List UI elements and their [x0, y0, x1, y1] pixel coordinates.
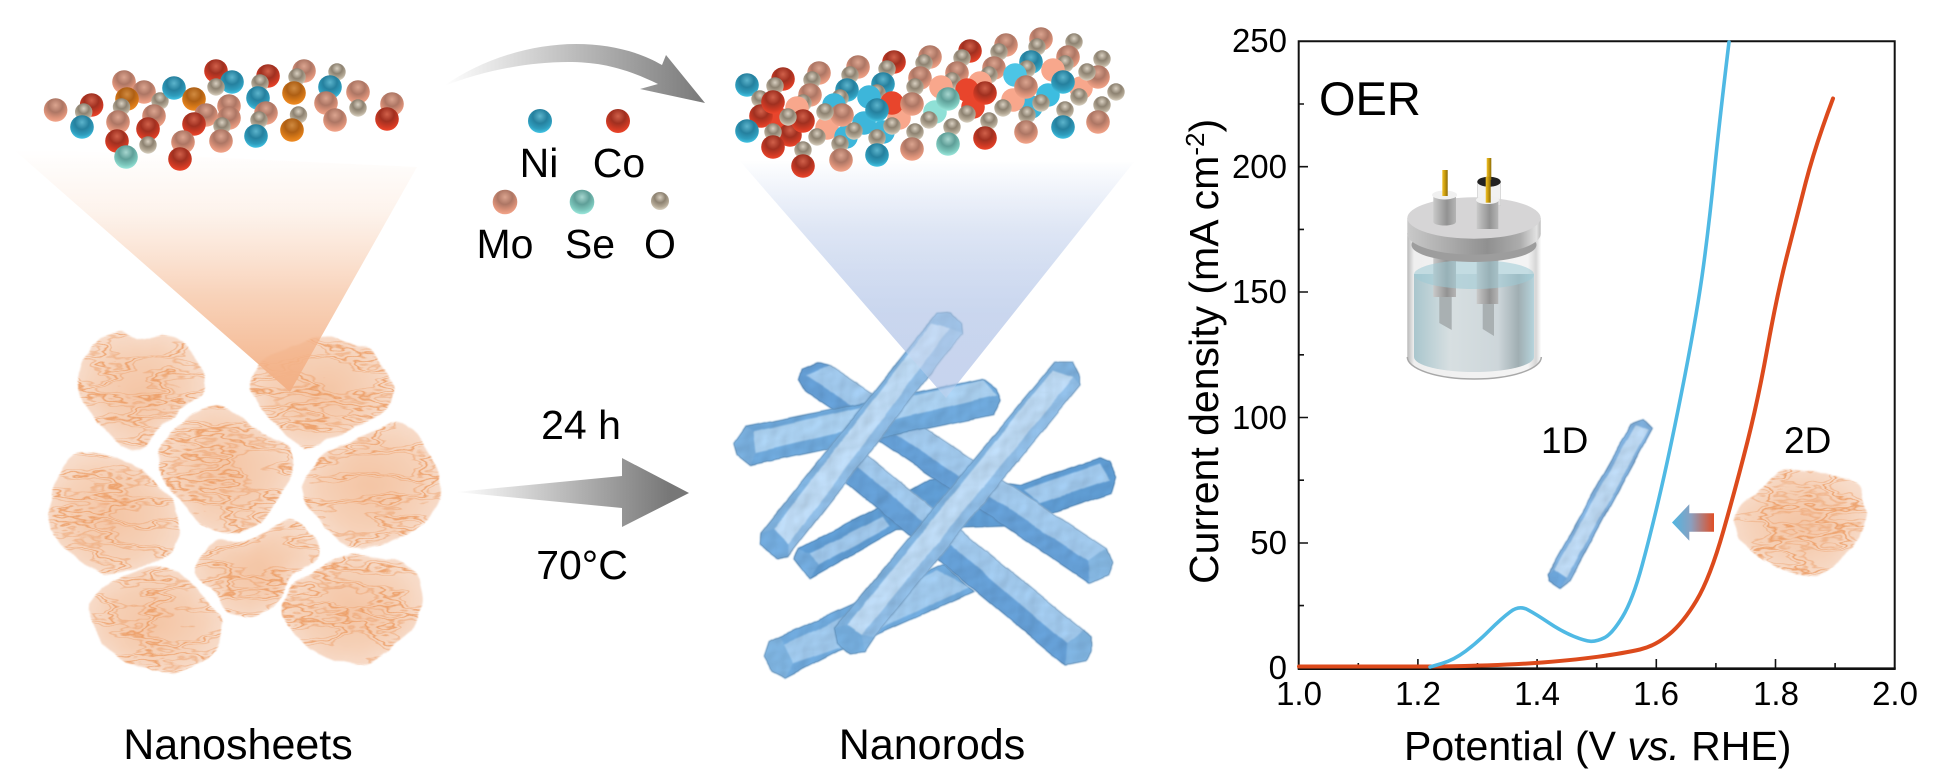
nanosheet left [49, 455, 178, 573]
label: OER: OER [1319, 72, 1421, 125]
nanosheet top left [80, 336, 202, 447]
nanosheet bottom right [284, 556, 421, 663]
x axis tick labels: 1.4 [1514, 675, 1560, 712]
label: 24 h: 24 h [541, 402, 621, 448]
rod diagonal upper [798, 362, 1113, 583]
x axis tick labels: 1.0 [1276, 675, 1322, 712]
rod steep front [833, 362, 1080, 653]
label: 1D: 1D [1541, 420, 1588, 461]
nanosheet bottom left [88, 570, 220, 673]
x axis title: Potential (V vs. RHE) [1404, 723, 1791, 769]
blue zoom cone overlay [739, 160, 1134, 398]
legend item: O [644, 192, 676, 267]
y axis tick labels: 100 [1232, 399, 1287, 436]
y axis tick labels [1232, 22, 1287, 686]
rod lower left to right [793, 457, 1117, 579]
legend item: Ni [520, 109, 558, 186]
nanosheet right [303, 422, 439, 547]
label: Nanorods: Nanorods [839, 721, 1025, 769]
y axis tick labels: 0 [1269, 649, 1287, 686]
rod bottom left [763, 563, 975, 678]
rod steep back [759, 312, 963, 559]
x axis tick labels: 2.0 [1872, 675, 1918, 712]
y axis tick labels: 250 [1232, 22, 1287, 59]
label: Nanosheets: Nanosheets [123, 721, 353, 769]
curve: 2D nanosheets [1299, 98, 1833, 666]
rod diagonal lower [830, 440, 1092, 666]
arrow: blue-red shift [1672, 504, 1714, 541]
rod near horizontal [733, 378, 1001, 466]
icon: mini nanorod [1547, 419, 1653, 589]
label: 70°C: 70°C [536, 542, 628, 588]
blue zoom cone back [739, 160, 1134, 398]
y axis tick labels: 200 [1232, 148, 1287, 185]
atoms: nanosheet lattice [44, 59, 404, 171]
y axis tick labels: 50 [1250, 524, 1287, 561]
nanosheet centre [160, 407, 292, 533]
panel: nanosheets cluster [49, 336, 439, 673]
chart: OER polarization curves [1180, 22, 1918, 769]
straight grey arrow [456, 458, 689, 527]
orange zoom cone [12, 148, 417, 392]
label: 2D: 2D [1784, 420, 1831, 461]
legend item: Se [565, 190, 615, 267]
x axis tick labels: 1.6 [1633, 675, 1679, 712]
legend item: O: O [644, 221, 676, 267]
y axis title: Current density (mA cm [1181, 156, 1227, 584]
x axis tick labels [1276, 675, 1918, 712]
legend item: Ni: Ni [520, 140, 558, 186]
icon: electrochemical cell [1407, 158, 1541, 379]
legend: element key [477, 109, 676, 267]
x axis tick labels: 1.2 [1395, 675, 1441, 712]
legend item: Co: Co [593, 140, 645, 186]
curve: 1D nanorods [1430, 42, 1729, 667]
chart frame and ticks [1298, 41, 1896, 669]
y axis tick labels: 150 [1232, 273, 1287, 310]
icon: mini nanosheet [1737, 472, 1865, 573]
atoms: nanorod lattice [735, 27, 1125, 178]
legend item: Se: Se [565, 221, 615, 267]
nanosheet small centre [195, 523, 321, 617]
legend item: Mo [477, 190, 533, 267]
panel: nanorods stack [733, 312, 1117, 678]
legend item: Mo: Mo [477, 221, 533, 267]
legend item: Co [593, 109, 645, 186]
y axis title: ) [1181, 119, 1227, 133]
curved grey arrow [444, 44, 705, 103]
x axis tick labels: 1.8 [1753, 675, 1799, 712]
nanosheet top right [253, 338, 392, 447]
y axis title: -2 [1180, 133, 1210, 156]
